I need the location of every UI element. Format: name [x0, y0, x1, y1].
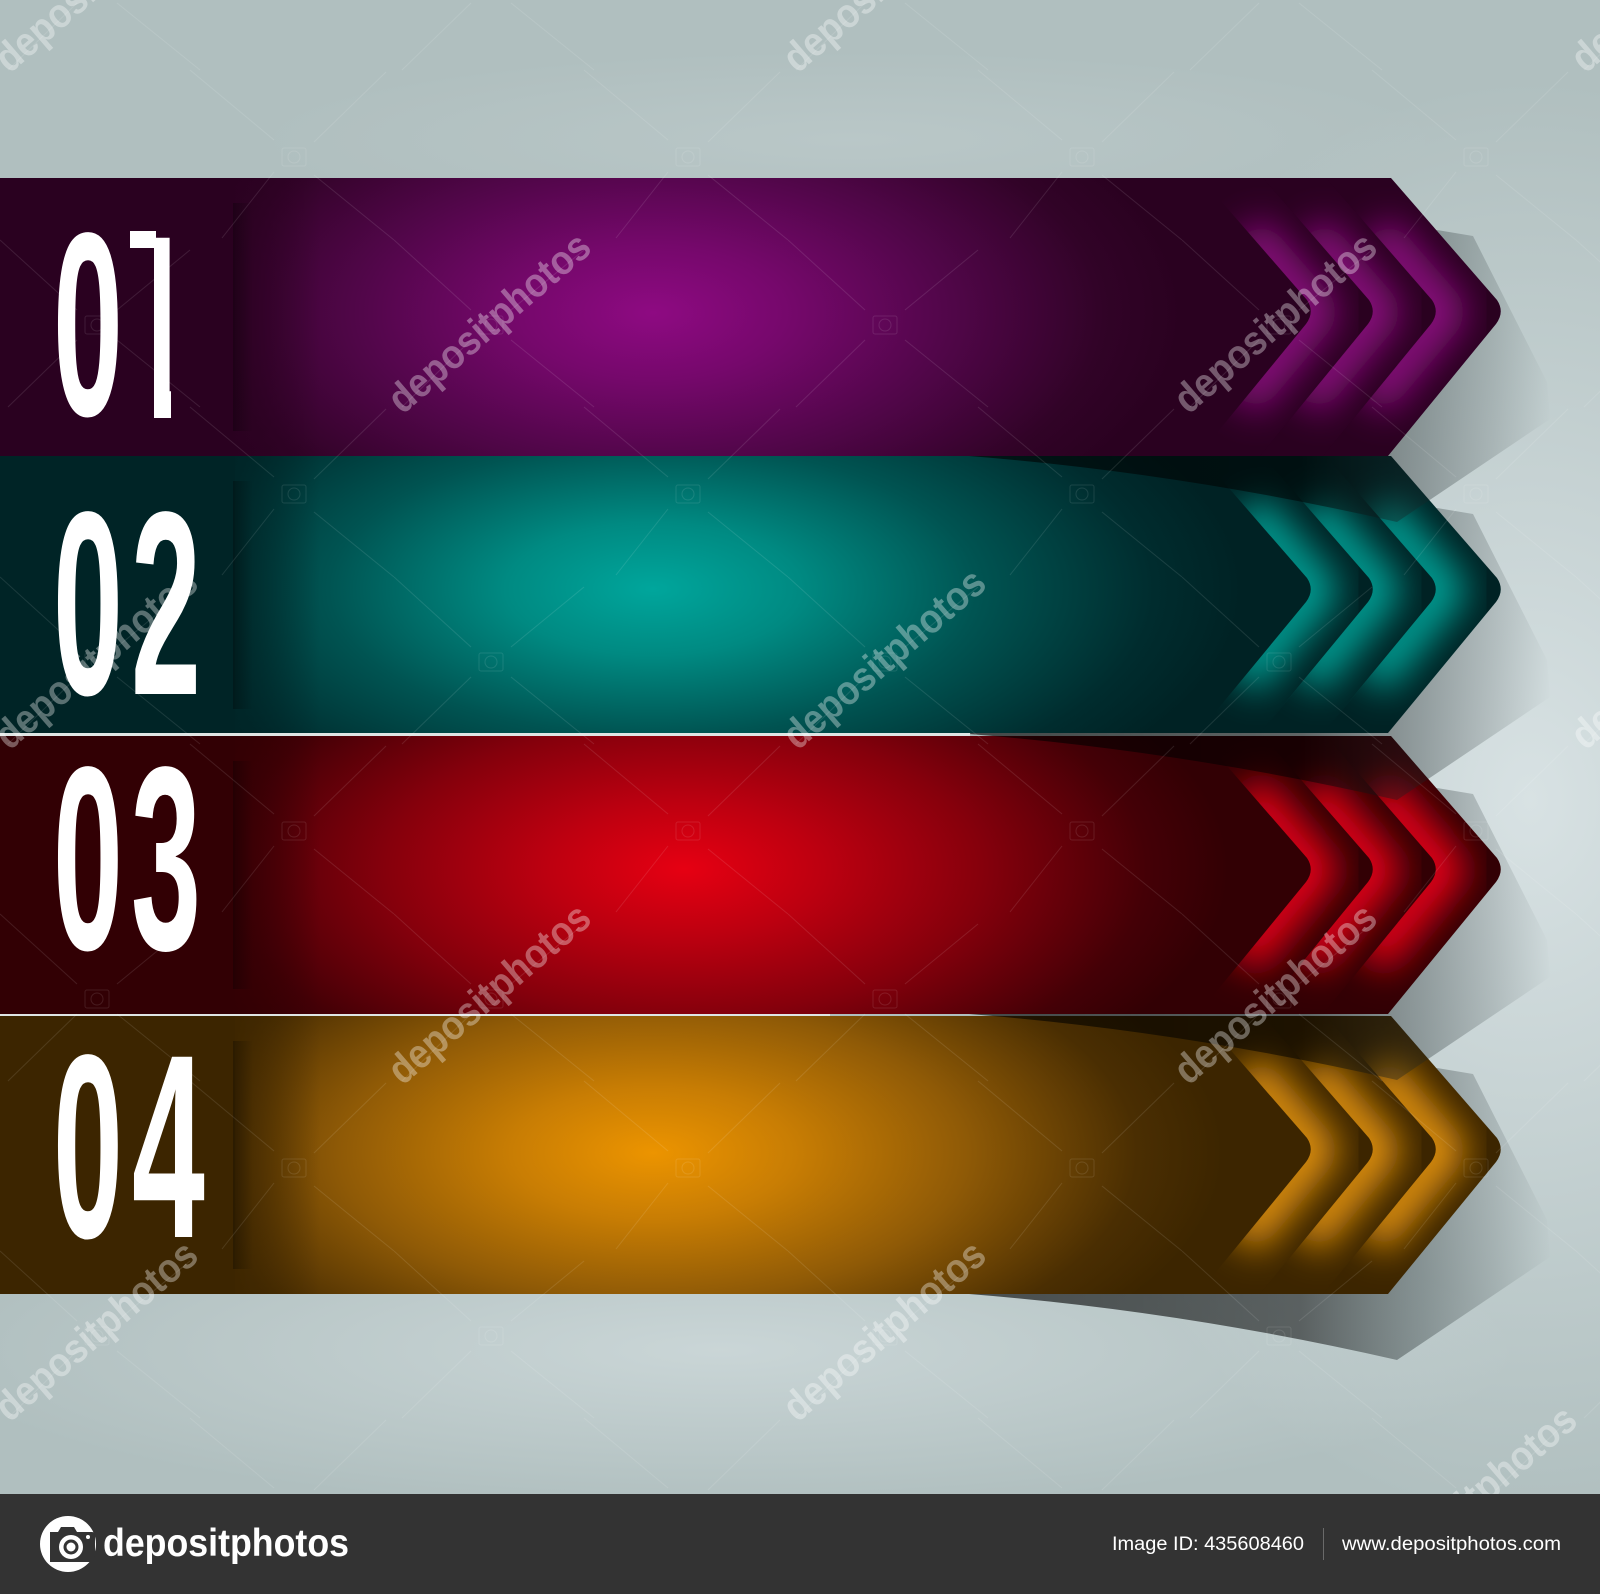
footer bar — [0, 1494, 1600, 1594]
shadow of ribbon 01 — [969, 230, 1550, 522]
ribbon 03 arrow chevrons — [1198, 736, 1501, 1014]
ribbon 01: purple arrow — [0, 178, 1501, 456]
number labels — [58, 231, 204, 1240]
shadow of ribbon 03 — [969, 788, 1550, 1080]
ribbon 02 body — [0, 456, 1311, 733]
number 03 — [53, 712, 201, 1005]
ribbon 02: teal arrow — [0, 456, 1501, 733]
website url: www.depositphotos.com — [1341, 1534, 1561, 1555]
image id: Image ID: 435608460 — [1112, 1534, 1304, 1555]
watermark text: depositphotos — [1164, 223, 1385, 422]
watermark text: depositphotos — [378, 894, 599, 1093]
watermark text: depositphotos — [1164, 894, 1385, 1093]
ribbon 04 drop shadow — [969, 1068, 1550, 1360]
ribbon 04 body — [0, 1016, 1311, 1294]
watermark text: depositphotos — [773, 1231, 994, 1430]
number 02: 0 — [53, 457, 123, 750]
ribbon 03: red arrow — [0, 736, 1501, 1014]
white separator lines — [0, 733, 970, 1016]
icon: camera logo — [40, 1516, 96, 1572]
number 03: 0 — [53, 712, 123, 1005]
number 03: 3 — [131, 712, 201, 1005]
number 04 — [53, 999, 205, 1293]
ribbon 04: amber arrow — [0, 1016, 1550, 1360]
number 04: 4 — [132, 999, 205, 1293]
ribbon 02 arrow chevrons — [1198, 456, 1501, 733]
number 01: 1 — [123, 181, 193, 474]
number 01: 0 — [53, 178, 123, 471]
number 04: 0 — [53, 1000, 123, 1293]
ribbon 01 body — [0, 178, 1311, 456]
watermark text: depositphotos — [773, 559, 994, 758]
ribbon 04 arrow chevrons — [1198, 1016, 1501, 1294]
watermark text: depositphotos — [378, 223, 599, 422]
ribbon 03 body — [0, 736, 1311, 1014]
logo wordmark: depositphotos — [103, 1522, 349, 1565]
number 01 — [58, 231, 171, 418]
number 02: 2 — [131, 457, 201, 750]
number 02 — [53, 457, 201, 750]
shadow of ribbon 02 — [969, 508, 1550, 800]
ribbon 01 arrow chevrons — [1198, 178, 1501, 456]
